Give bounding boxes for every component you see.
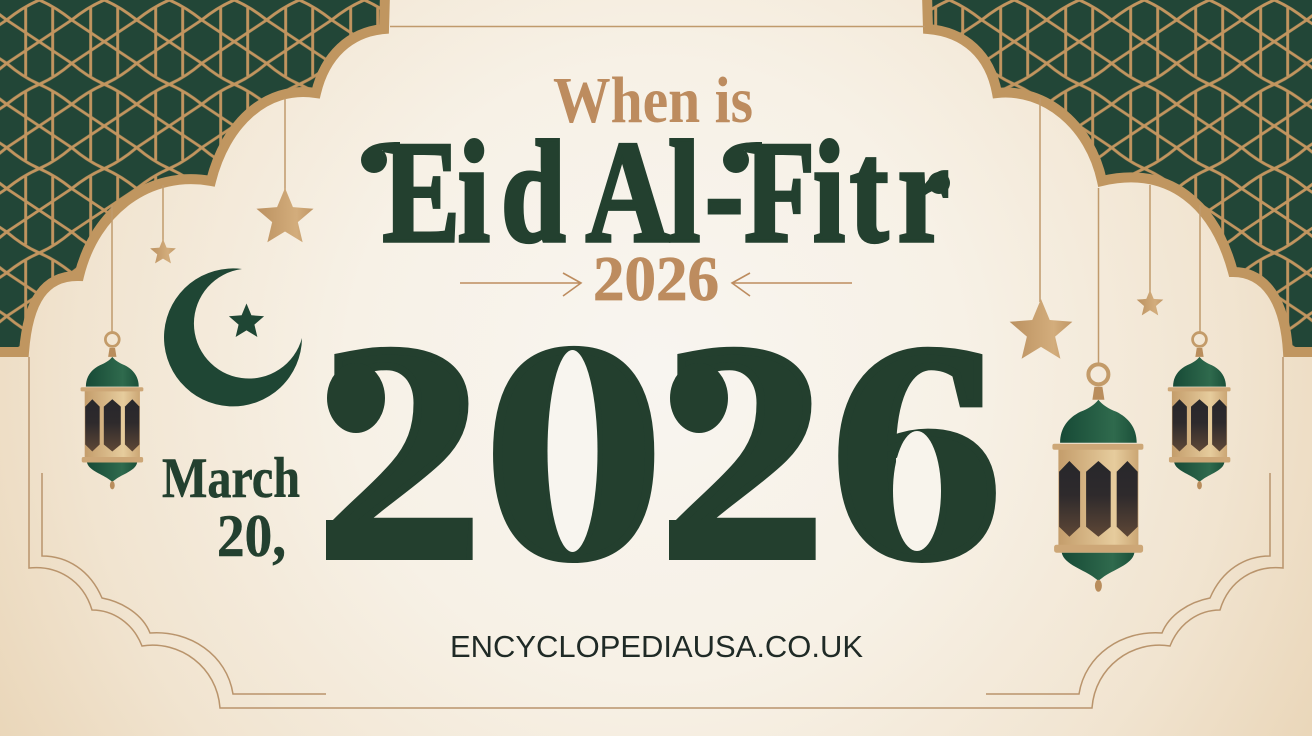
right bottom corner frame lines (656, 357, 1283, 708)
star: small left (150, 239, 176, 263)
date: March 20,: March (162, 447, 300, 510)
star: large left (256, 188, 314, 242)
big year 2026 (318, 279, 1002, 624)
background lattice panel (0, 0, 1312, 360)
heading: When is: When is (553, 64, 753, 137)
icon: lantern small right (1168, 333, 1231, 489)
top thin rule (390, 26, 925, 28)
icon: lantern large right (1052, 364, 1143, 592)
icon: crescent moon and star (164, 268, 302, 406)
big year 2026: 2 (660, 281, 826, 624)
small year: 2026 (593, 244, 719, 314)
big year 2026: 6 (831, 281, 1002, 624)
star: small right (1137, 290, 1163, 315)
subtitle year with arrows (460, 244, 852, 314)
date: March 20, (162, 447, 300, 569)
big year 2026: 2 (318, 281, 483, 624)
big year 2026: 0 (484, 279, 663, 624)
date: March 20,: 20, (217, 503, 286, 569)
arrow: right (732, 273, 852, 296)
left bottom corner frame lines (29, 357, 656, 708)
arrow: left (460, 273, 581, 296)
hanging strings (112, 98, 1200, 363)
star: large right (1010, 299, 1072, 359)
icon: lantern left (81, 333, 143, 489)
title: Eid Al-Fitr: Eid Al-Fitr (382, 111, 949, 273)
website footer: ENCYCLOPEDIAUSA.CO.UK (450, 629, 863, 664)
